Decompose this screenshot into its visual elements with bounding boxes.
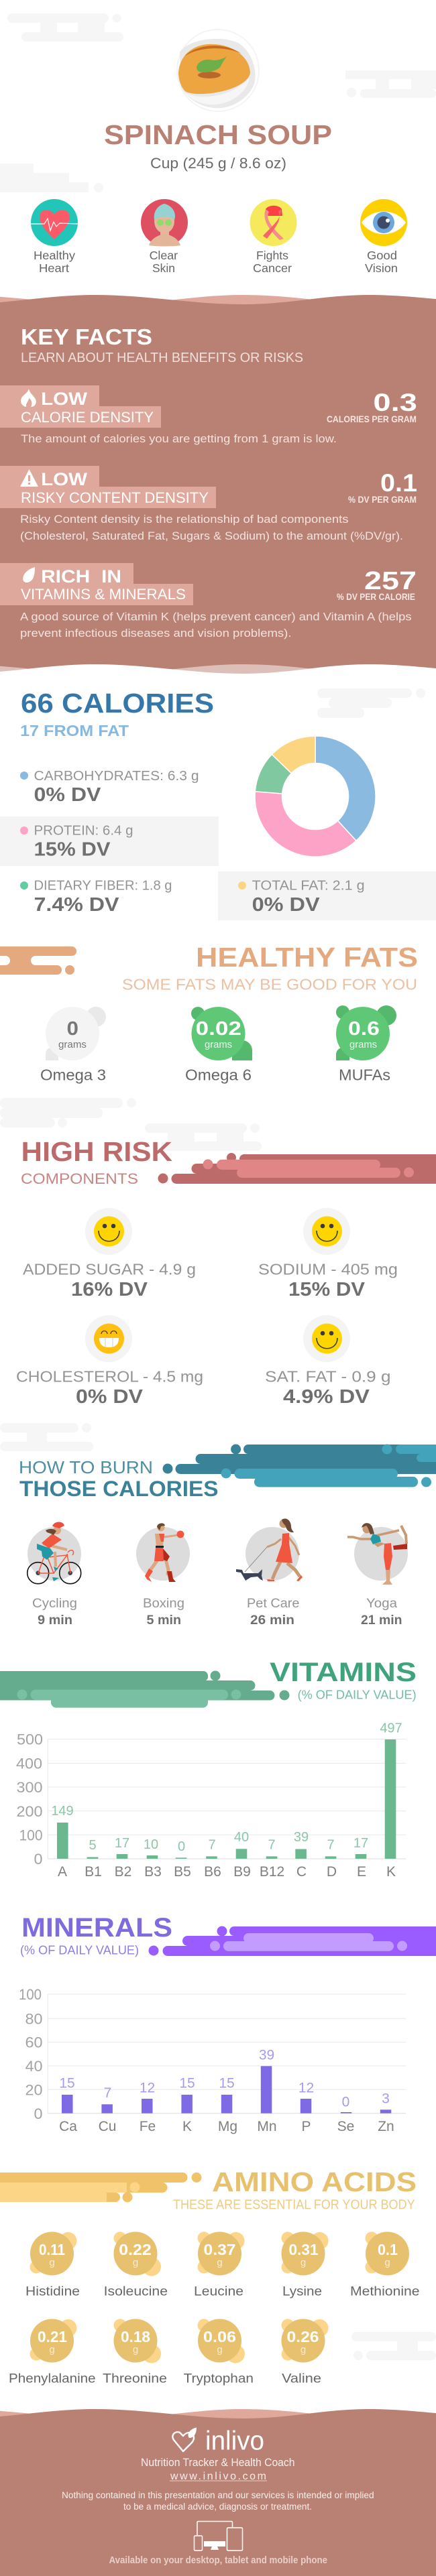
activity: boxing (136, 1523, 190, 1582)
badge: valine: g (301, 2344, 306, 2355)
bar chart: minerals: 12 (298, 2081, 314, 2095)
disclaimer: to be a medical advice, diagnosis or treatment. (123, 2502, 312, 2512)
bar chart: minerals: 12 (140, 2081, 155, 2095)
panel: calories (0, 688, 436, 920)
fact: rich in vitamins and minerals: % DV PER CALORIE (337, 591, 415, 602)
badge: phenylalanine: g (49, 2344, 55, 2355)
icon: good vision eye (360, 199, 407, 246)
bar chart: vitamins: B6 (204, 1864, 221, 1880)
bar chart: minerals: 15 (219, 2075, 235, 2091)
item: sodium: 15% DV (288, 1279, 366, 1300)
item: saturated fat: 4.9% DV (283, 1386, 370, 1408)
badge: phenylalanine: Phenylalanine (9, 2372, 96, 2386)
icon: devices (195, 2522, 243, 2551)
badge: histidine: 0.11 (39, 2241, 65, 2258)
badge: threonine (103, 2319, 167, 2386)
item: added sugar: ADDED SUGAR - 4.9 g (23, 1261, 196, 1278)
label: healthy heart: Healthy (34, 249, 75, 262)
badge: mufas: 0.6 (348, 1018, 380, 1040)
bar chart: vitamins: 7 (268, 1838, 276, 1853)
bar chart: minerals: 40 (25, 2058, 43, 2075)
panel: minerals (19, 1913, 436, 2134)
label: boxing (143, 1597, 184, 1628)
badge: phenylalanine: 0.21 (38, 2328, 67, 2345)
legend: total fat (218, 871, 436, 920)
fact: low risky content density: LOW (41, 469, 88, 489)
website link: www.inlivo.com (170, 2471, 266, 2482)
panel: key facts (0, 295, 436, 678)
header: food photo and title (104, 29, 332, 172)
label: fights cancer: Cancer (253, 261, 292, 275)
bar chart: vitamins: B3 (144, 1864, 162, 1880)
logo: inlivo heart and wordmark (172, 2427, 264, 2456)
legend: carbohydrates (20, 769, 199, 806)
badge: valine: 0.26 (287, 2328, 319, 2345)
heading: minerals: MINERALS (21, 1913, 172, 1943)
item: added sugar: 16% DV (71, 1279, 148, 1300)
label: good vision (365, 249, 398, 275)
subheading: SOME FATS MAY BE GOOD FOR YOU (122, 976, 417, 993)
bar chart: minerals: K (182, 2119, 192, 2134)
bar chart: vitamins (16, 1721, 406, 1880)
bar chart: vitamins: 17 (353, 1836, 368, 1851)
bar chart: vitamins: B5 (174, 1864, 191, 1880)
subheading: 17 from fat: 17 FROM FAT (20, 722, 129, 739)
bar chart: vitamins: 7 (208, 1838, 216, 1853)
bar chart: vitamins: 10 (144, 1837, 158, 1852)
fact: rich in vitamins and minerals: A good source of Vitamin K (helps prevent cancer) and Vitamin A (helps (20, 611, 412, 623)
badge: lysine (282, 2232, 329, 2299)
label: good vision: Vision (365, 261, 398, 275)
legend: carbohydrates: 0% DV (34, 784, 101, 806)
icon: flame (21, 389, 36, 407)
badge: threonine: Threonine (103, 2372, 167, 2386)
item: sodium (258, 1208, 398, 1300)
bar chart: vitamins: 500 (17, 1731, 43, 1748)
fact: rich in vitamins and minerals: RICH IN (41, 566, 121, 587)
badge: omega 3 (40, 1007, 106, 1084)
bar chart: vitamins: 200 (16, 1803, 43, 1820)
disclaimer (62, 2490, 374, 2512)
banner shape: orange (0, 946, 76, 975)
heading: amino acids: AMINO ACIDS (212, 2166, 417, 2197)
label: pet care: 26 min (250, 1613, 294, 1628)
bar chart: vitamins: 0 (178, 1839, 185, 1854)
heading: healthy fats: HEALTHY FATS (196, 942, 418, 973)
bar chart: vitamins: 5 (89, 1838, 97, 1853)
label: yoga: Yoga (366, 1597, 397, 1611)
banner shape: red (158, 1153, 436, 1184)
bar chart: minerals: Mn (257, 2119, 277, 2134)
fact: rich in vitamins and minerals: prevent infectious diseases and vision problems). (20, 627, 291, 639)
bar chart: minerals: 3 (382, 2091, 390, 2106)
icon: healthy heart (31, 199, 78, 246)
bar chart: minerals: Ca (59, 2119, 77, 2134)
banner shape: green (0, 1670, 290, 1708)
fact: rich in vitamins and minerals: VITAMINS & MINERALS (21, 586, 186, 603)
badge: methionine (350, 2232, 420, 2299)
badge: methionine: g (384, 2257, 390, 2268)
bar chart: vitamins: E (357, 1864, 366, 1880)
bar chart: vitamins: B12 (260, 1864, 284, 1880)
label: healthy heart (34, 249, 75, 275)
logo: inlivo heart and wordmark: inlivo (205, 2427, 264, 2456)
badge: isoleucine: Isoleucine (104, 2284, 168, 2299)
legend: dietary fiber: 7.4% DV (34, 894, 119, 916)
bar chart: vitamins: 0 (34, 1851, 43, 1867)
title: SPINACH SOUP (104, 119, 332, 150)
legend: protein (0, 816, 219, 866)
fact: low risky content density: RISKY CONTENT DENSITY (21, 489, 209, 506)
bar chart: minerals: P (301, 2119, 311, 2134)
legend: protein: 15% DV (34, 839, 111, 861)
bar chart: minerals: 15 (59, 2075, 75, 2091)
legend: dietary fiber (20, 879, 172, 916)
label: pet care: Pet Care (247, 1597, 299, 1611)
label: pet care (247, 1597, 299, 1628)
legend: protein: PROTEIN: 6.4 g (34, 824, 133, 839)
item: cholesterol (16, 1315, 203, 1408)
donut chart (255, 736, 376, 857)
panel: amino acids (0, 2166, 420, 2386)
fact: low calorie density: CALORIES PER GRAM (327, 414, 417, 424)
bar chart: minerals: 7 (104, 2085, 111, 2101)
label: clear skin: Skin (152, 261, 175, 275)
heading: vitamins: VITAMINS (270, 1658, 417, 1687)
bar chart: minerals: 80 (25, 2010, 43, 2027)
fact: low risky content density: Risky Content density is the relationship of bad components (20, 513, 349, 526)
badge: mufas (336, 1005, 396, 1084)
item: sodium: SODIUM - 405 mg (258, 1261, 398, 1278)
subheading: percent of daily value: (% OF DAILY VALUE) (298, 1688, 417, 1701)
bar chart: minerals: Mg (218, 2119, 237, 2134)
subheading: LEARN ABOUT HEALTH BENEFITS OR RISKS (21, 351, 303, 365)
subheading: THESE ARE ESSENTIAL FOR YOUR BODY (173, 2197, 415, 2212)
label: fights cancer: Fights (256, 249, 288, 262)
fact: low risky content density: % DV PER GRAM (348, 494, 417, 505)
badge: leucine: 0.37 (204, 2241, 236, 2258)
bar chart: vitamins: B9 (233, 1864, 251, 1880)
activity: yoga (347, 1523, 408, 1585)
label: good vision: Good (367, 249, 397, 262)
item: saturated fat: SAT. FAT - 0.9 g (265, 1368, 390, 1386)
icon: warning triangle (20, 469, 38, 487)
badge: phenylalanine (9, 2319, 96, 2386)
badge: mufas: MUFAs (339, 1066, 390, 1084)
item: added sugar (23, 1208, 196, 1300)
badge: omega 6: 0.02 (196, 1018, 241, 1040)
benefits icon row (31, 199, 407, 275)
bar chart: vitamins: D (327, 1864, 337, 1880)
fact: low calorie density: 0.3 (373, 389, 417, 416)
bar chart: vitamins: 40 (234, 1830, 249, 1845)
banner shape: amber (0, 2172, 201, 2203)
badge: tryptophan (184, 2319, 254, 2386)
icon: clear skin (141, 199, 188, 247)
availability note: Available on your desktop, tablet and mobile phone (109, 2555, 327, 2566)
badge: isoleucine (104, 2232, 168, 2299)
bar chart: minerals: 20 (25, 2081, 43, 2098)
fact: low calorie density (0, 385, 417, 445)
item: cholesterol: CHOLESTEROL - 4.5 mg (16, 1368, 203, 1386)
bar chart: vitamins: 497 (380, 1721, 402, 1736)
legend: carbohydrates: CARBOHYDRATES: 6.3 g (34, 769, 199, 784)
label: boxing: Boxing (143, 1597, 184, 1611)
badge: tryptophan: 0.06 (203, 2328, 236, 2345)
legend: dietary fiber: DIETARY FIBER: 1.8 g (34, 879, 172, 894)
badge: omega 3: grams (58, 1039, 87, 1050)
legend: total fat: 0% DV (252, 894, 320, 916)
fact: rich in vitamins and minerals (0, 563, 417, 639)
badge: omega 6: Omega 6 (185, 1066, 252, 1084)
bar chart: vitamins: 39 (294, 1830, 309, 1845)
bar chart: vitamins: 300 (16, 1779, 43, 1796)
badge: leucine (194, 2232, 244, 2299)
icon: fights cancer ribbon (250, 199, 296, 246)
fact: low calorie density: The amount of calories you are getting from 1 gram is low. (21, 433, 337, 445)
badge: lysine: Lysine (282, 2284, 322, 2299)
badge: leucine: g (217, 2257, 223, 2268)
tagline: Nutrition Tracker & Health Coach (141, 2457, 295, 2469)
activity: cycling (28, 1522, 81, 1584)
heading: high risk: HIGH RISK (21, 1136, 172, 1167)
badge: histidine: g (49, 2257, 55, 2268)
badge: histidine: Histidine (25, 2284, 80, 2299)
bar chart: vitamins: B2 (115, 1864, 131, 1880)
serving size: Cup (245 g / 8.6 oz) (150, 155, 286, 172)
badge: methionine: 0.1 (378, 2241, 398, 2258)
badge: omega 3: 0 (67, 1018, 78, 1040)
banner shape: purple (149, 1926, 436, 1956)
label: yoga: 21 min (361, 1613, 402, 1628)
label: cycling: 9 min (38, 1613, 72, 1628)
badge: tryptophan: Tryptophan (184, 2372, 254, 2386)
label: clear skin: Clear (150, 249, 178, 262)
bar chart: minerals: 39 (259, 2047, 274, 2063)
icon: leaf (23, 567, 35, 582)
subheading: percent of daily value: (% OF DAILY VALUE) (20, 1944, 139, 1957)
panel: vitamins (0, 1658, 417, 1880)
label: yoga (361, 1597, 402, 1628)
subheading: components: COMPONENTS (21, 1170, 138, 1187)
bar chart: vitamins: B1 (85, 1864, 102, 1880)
bar chart: vitamins: 400 (16, 1755, 42, 1772)
panel: healthy fats (0, 942, 418, 1084)
bar chart: minerals: Fe (140, 2119, 156, 2134)
heading: 66 calories: 66 CALORIES (21, 688, 214, 719)
badge: leucine: Leucine (194, 2284, 243, 2299)
label: fights cancer (253, 249, 292, 275)
item: cholesterol: 0% DV (76, 1386, 144, 1408)
badge: isoleucine: 0.22 (119, 2241, 152, 2258)
bar chart: minerals: 0 (34, 2105, 43, 2122)
disclaimer: Nothing contained in this presentation and our services is intended or implied (62, 2490, 374, 2500)
heading: those calories: THOSE CALORIES (19, 1477, 219, 1501)
fact: low calorie density: LOW (41, 389, 88, 409)
fact: low risky content density: (Cholesterol, Saturated Fat, Sugars & Sodium) to the amount (%DV/gr). (20, 530, 403, 542)
heading: how to burn: HOW TO BURN (19, 1457, 153, 1477)
soup bowl photo (177, 29, 259, 111)
panel: high risk components (16, 1136, 436, 1408)
fact: rich in vitamins and minerals: 257 (364, 567, 417, 595)
panel: how to burn calories (19, 1444, 436, 1628)
bar chart: minerals: 60 (25, 2034, 43, 2051)
fact: low risky content density (0, 466, 417, 542)
bar chart: vitamins: 149 (51, 1804, 74, 1819)
badge: threonine: 0.18 (121, 2328, 150, 2345)
badge: valine (282, 2319, 329, 2386)
badge: tryptophan: g (217, 2344, 223, 2355)
bar chart: vitamins: 7 (327, 1838, 335, 1853)
heading: key facts: KEY FACTS (21, 324, 152, 349)
bar chart: minerals: Cu (99, 2119, 116, 2134)
badge: omega 6: grams (205, 1039, 232, 1050)
bar chart: minerals: Se (337, 2119, 354, 2134)
badge: omega 6 (185, 1007, 252, 1084)
activity: pet care (236, 1518, 303, 1581)
bar chart: minerals: 15 (179, 2075, 195, 2091)
label: clear skin (150, 249, 178, 275)
banner shape: teal (162, 1444, 436, 1487)
bar chart: minerals: 0 (342, 2094, 349, 2110)
legend: total fat: TOTAL FAT: 2.1 g (252, 879, 365, 894)
item: saturated fat (265, 1315, 390, 1408)
bar chart: vitamins: 100 (19, 1827, 43, 1843)
bar chart: minerals: Zn (378, 2119, 394, 2134)
bar chart: vitamins: C (296, 1864, 307, 1880)
badge: methionine: Methionine (350, 2284, 420, 2299)
fact: low risky content density: 0.1 (380, 469, 417, 497)
bar chart: minerals: 100 (19, 1986, 42, 2003)
badge: threonine: g (133, 2344, 138, 2355)
bar chart: vitamins: A (58, 1864, 67, 1880)
badge: lysine: 0.31 (288, 2241, 319, 2258)
fact: low calorie density: CALORIE DENSITY (21, 409, 154, 426)
badge: histidine (25, 2232, 80, 2299)
label: cycling: Cycling (32, 1597, 77, 1611)
badge: isoleucine: g (133, 2257, 138, 2268)
badge: lysine: g (301, 2257, 306, 2268)
bar chart: vitamins: 17 (115, 1836, 129, 1851)
footer (0, 2409, 436, 2576)
label: healthy heart: Heart (39, 261, 69, 275)
badge: mufas: grams (349, 1039, 377, 1050)
bar chart: minerals (19, 1986, 406, 2134)
bar chart: vitamins: K (386, 1864, 396, 1880)
label: boxing: 5 min (146, 1613, 181, 1628)
badge: valine: Valine (282, 2372, 321, 2386)
badge: omega 3: Omega 3 (40, 1066, 106, 1084)
label: cycling (32, 1597, 77, 1628)
